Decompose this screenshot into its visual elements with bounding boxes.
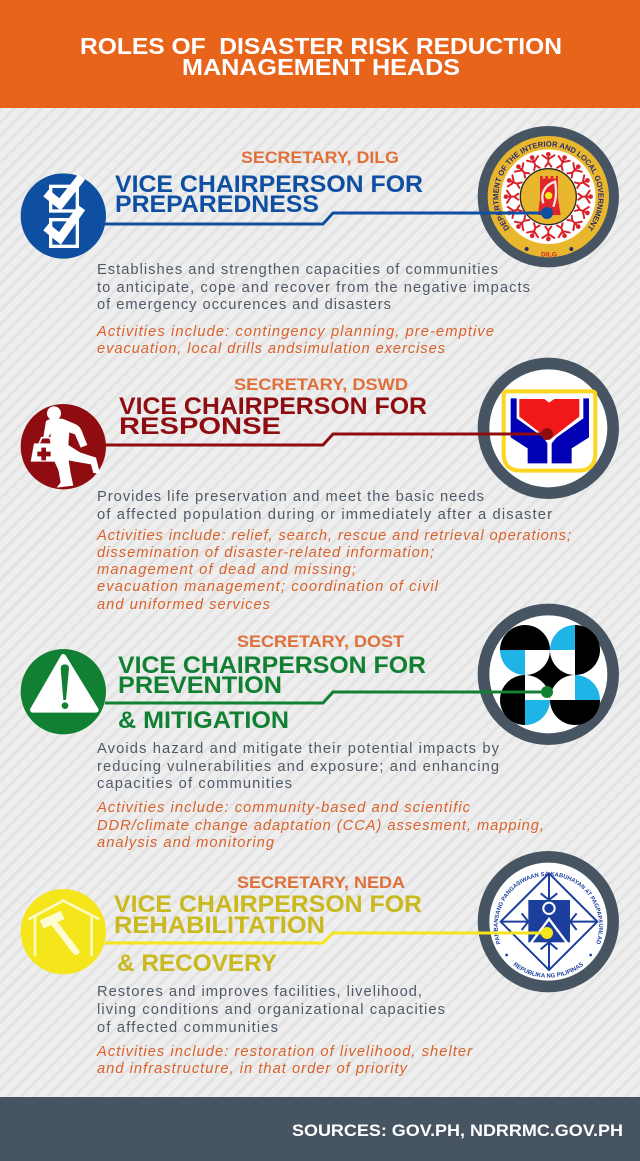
heading: VICE CHAIRPERSON FOR bbox=[115, 171, 423, 198]
icon: hammer and house bbox=[21, 889, 106, 974]
activities: dissemination of disaster-related information; bbox=[97, 545, 434, 561]
description: Establishes and strengthen capacities of communities bbox=[97, 262, 498, 278]
icon: checklist bbox=[21, 173, 106, 259]
activities: evacuation, local drills andsimulation exercises bbox=[97, 341, 446, 357]
title: ROLES OF DISASTER RISK REDUCTION bbox=[80, 33, 562, 59]
description: Avoids hazard and mitigate their potential impacts by bbox=[97, 741, 500, 757]
description: of affected communities bbox=[97, 1020, 278, 1036]
description: to anticipate, cope and recover from the negative impacts bbox=[97, 280, 530, 296]
connector line bbox=[105, 927, 553, 943]
secretary label: SECRETARY, NEDA bbox=[237, 874, 405, 892]
activities: DDR/climate change adaptation (CCA) assesment, mapping, bbox=[97, 818, 544, 834]
description bbox=[97, 984, 445, 1036]
heading: PREPAREDNESS bbox=[115, 191, 319, 218]
description: living conditions and organizational capacities bbox=[97, 1002, 445, 1018]
activities: and infrastructure, in that order of priority bbox=[97, 1061, 409, 1077]
activities bbox=[96, 1044, 473, 1077]
heading: VICE CHAIRPERSON FOR bbox=[118, 652, 426, 679]
panel: preparedness bbox=[20, 126, 619, 357]
logo: DOST bbox=[478, 604, 619, 745]
title bbox=[80, 33, 562, 80]
description bbox=[97, 741, 500, 792]
heading: RESPONSE bbox=[119, 413, 281, 440]
activities: evacuation management; coordination of civil bbox=[97, 579, 439, 595]
logo: DILG seal: DEPARTMENT OF THE INTERIOR AND LOCAL GOVERNMENT bbox=[493, 141, 604, 232]
activities: Activities include: relief, search, rescue and retrieval operations; bbox=[96, 528, 571, 544]
activities: Activities include: community-based and scientific bbox=[96, 800, 471, 816]
heading: PREVENTION bbox=[118, 672, 282, 699]
logo: NEDA seal bbox=[478, 851, 619, 992]
heading bbox=[119, 393, 427, 440]
panel: prevention and mitigation bbox=[21, 604, 619, 851]
heading bbox=[118, 652, 426, 734]
icon: warning triangle bbox=[21, 649, 106, 734]
title: MANAGEMENT HEADS bbox=[182, 54, 460, 80]
description: Provides life preservation and meet the basic needs bbox=[97, 489, 484, 505]
connector line bbox=[105, 686, 553, 703]
description: reducing vulnerabilities and exposure; and enhancing bbox=[97, 759, 499, 775]
logo: DILG seal: DILG bbox=[541, 251, 557, 258]
icon: medic runner bbox=[21, 404, 106, 489]
heading: & MITIGATION bbox=[118, 707, 289, 734]
secretary label: SECRETARY, DILG bbox=[241, 149, 399, 167]
description bbox=[97, 489, 552, 523]
heading: VICE CHAIRPERSON FOR bbox=[114, 891, 422, 918]
sources: SOURCES: GOV.PH, NDRRMC.GOV.PH bbox=[292, 1121, 623, 1140]
logo: DILG seal bbox=[478, 126, 619, 268]
activities: management of dead and missing; bbox=[97, 562, 356, 578]
secretary label: SECRETARY, DOST bbox=[237, 633, 404, 651]
panel: response bbox=[21, 358, 619, 613]
activities: Activities include: restoration of livelihood, shelter bbox=[96, 1044, 473, 1060]
activities bbox=[96, 528, 571, 613]
heading bbox=[115, 171, 423, 218]
footer band bbox=[0, 1097, 640, 1161]
logo: DSWD bbox=[478, 358, 619, 499]
secretary label: SECRETARY, DSWD bbox=[234, 376, 408, 394]
description: of emergency occurences and disasters bbox=[97, 297, 391, 313]
description bbox=[97, 262, 530, 313]
description: Restores and improves facilities, livelihood, bbox=[97, 984, 422, 1000]
heading: REHABILITATION bbox=[114, 912, 325, 939]
heading: & RECOVERY bbox=[117, 950, 277, 977]
heading bbox=[114, 891, 422, 977]
activities: Activities include: contingency planning, pre-emptive bbox=[96, 324, 494, 340]
description: capacities of communities bbox=[97, 776, 292, 792]
activities: analysis and monitoring bbox=[97, 835, 275, 851]
activities: and uniformed services bbox=[97, 597, 271, 613]
activities bbox=[96, 324, 494, 357]
logo: NEDA seal: REPUBLIKA NG PILIPINAS bbox=[513, 962, 583, 978]
header band bbox=[0, 0, 640, 108]
description: of affected population during or immediately after a disaster bbox=[97, 507, 552, 523]
panel: rehabilitation and recovery bbox=[20, 851, 619, 1077]
connector line bbox=[105, 428, 553, 445]
logo: NEDA seal: PAMBANSANG PANGASIWAAN SA KABUHAYAN AT PAGPAPAUNLAD bbox=[494, 872, 604, 944]
activities bbox=[96, 800, 544, 851]
connector line bbox=[105, 207, 553, 224]
heading: VICE CHAIRPERSON FOR bbox=[119, 393, 427, 420]
